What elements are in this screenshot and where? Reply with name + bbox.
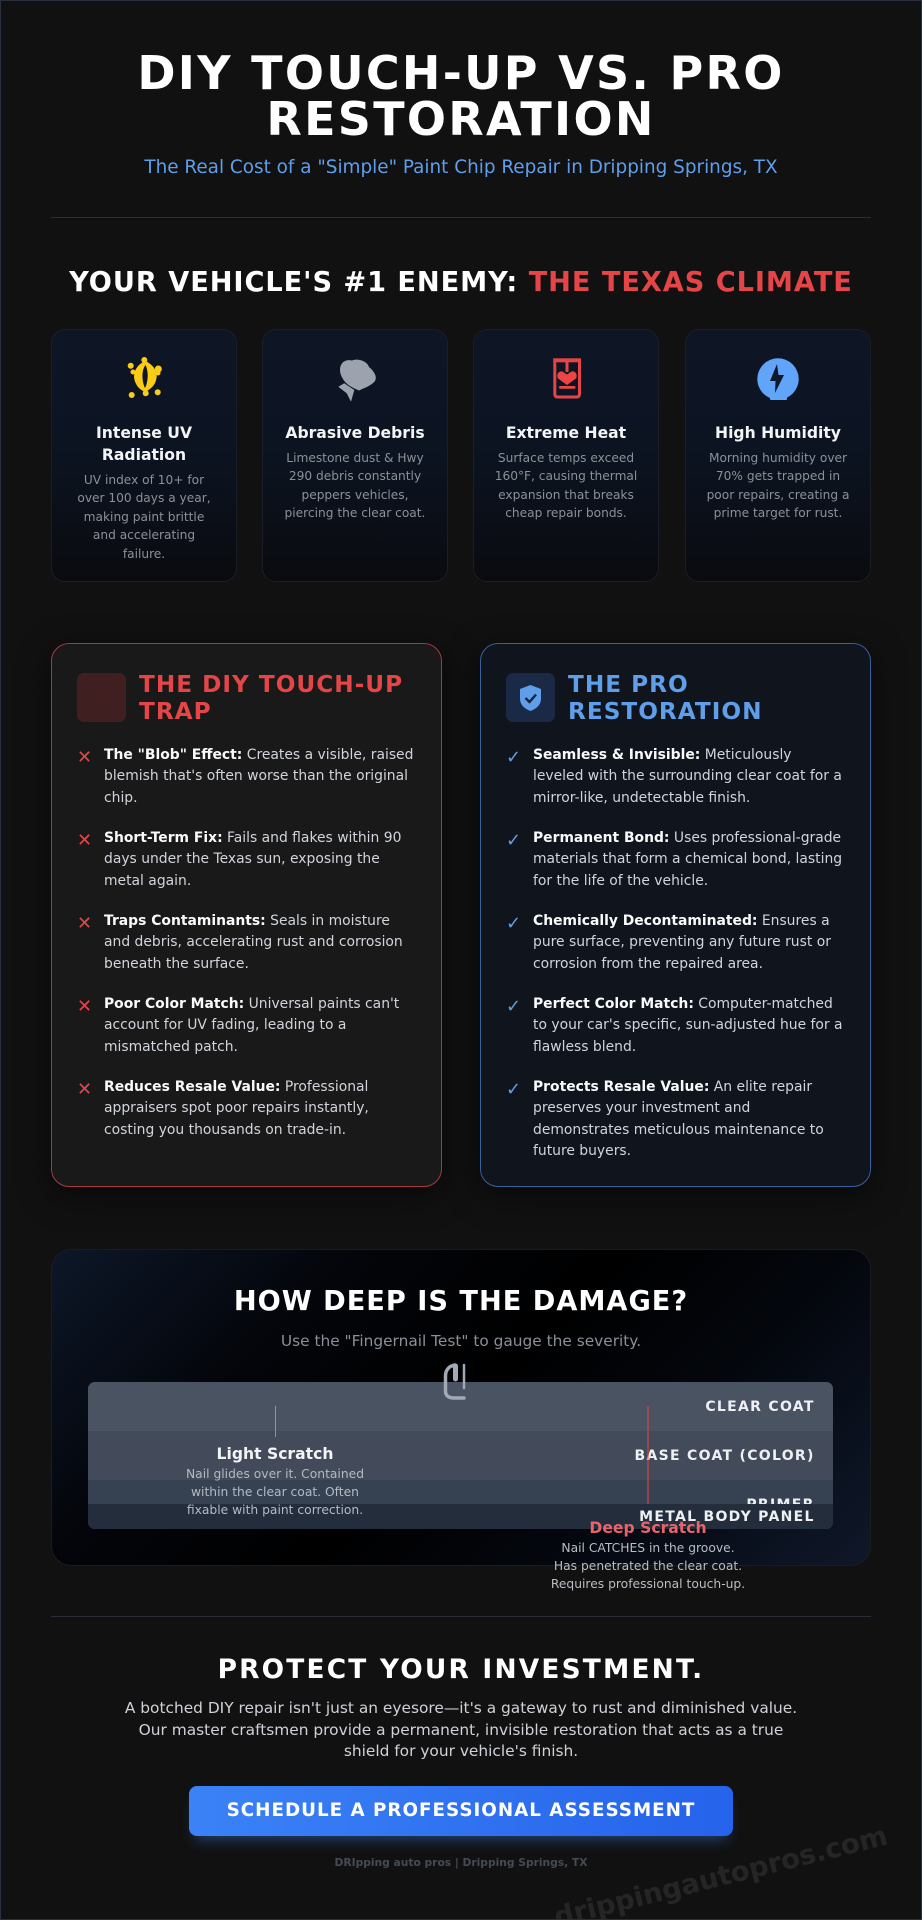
Pro item: seamless: Seamless & Invisible: Meticulously bbox=[533, 746, 792, 762]
Pro item: seamless: mirror-like, undetectable finish. bbox=[533, 790, 750, 806]
deep scratch marker bbox=[647, 1406, 649, 1504]
Pro item: protects resale value: demonstrates meticulous maintenance to bbox=[533, 1122, 824, 1138]
deep scratch description: Nail CATCHES in the groove. bbox=[561, 1540, 735, 1554]
card description bbox=[495, 451, 637, 520]
layer: base coat bbox=[88, 1431, 833, 1480]
Pro item: permanent bond bbox=[533, 830, 842, 889]
Pro heading bbox=[568, 671, 762, 725]
DIY item: reduces resale value bbox=[104, 1078, 369, 1138]
title bbox=[137, 46, 785, 146]
CTA button: SCHEDULE A PROFESSIONAL ASSESSMENT bbox=[227, 1800, 695, 1821]
card title: High Humidity bbox=[715, 424, 841, 442]
CTA paragraph: Our master craftsmen provide a permanent, invisible restoration that acts as a true bbox=[139, 1721, 783, 1739]
card description: prime target for rust. bbox=[714, 506, 842, 520]
icon: humidity bolt bbox=[757, 358, 799, 400]
Pro item: permanent bond: for the life of the vehicle. bbox=[533, 873, 708, 889]
mark: check: ✓ bbox=[506, 913, 521, 934]
title: DIY TOUCH-UP VS. PRO bbox=[137, 46, 785, 100]
card description: poor repairs, creating a bbox=[707, 488, 849, 502]
footer credit: DRIpping auto pros | Dripping Springs, TX bbox=[335, 1856, 587, 1869]
card description: and accelerating bbox=[93, 528, 195, 542]
paint layer diagram bbox=[88, 1382, 833, 1529]
icon: heat gauge bbox=[553, 358, 581, 398]
DIY item: traps contaminants: and debris, accelerating rust and corrosion bbox=[104, 934, 403, 950]
layer: metal body panel: METAL BODY PANEL bbox=[639, 1509, 815, 1525]
card title: Radiation bbox=[102, 446, 186, 464]
panel: intense UV radiation card bbox=[51, 329, 237, 582]
mark: check: ✓ bbox=[506, 1079, 521, 1100]
card description: over 100 days a year, bbox=[77, 491, 211, 505]
DIY item: blob effect bbox=[104, 746, 413, 806]
DIY item: reduces resale value: Reduces Resale Value: Professional bbox=[104, 1078, 368, 1094]
icon box: shield bbox=[506, 673, 555, 722]
layer: primer bbox=[88, 1480, 833, 1529]
panel: the pro restoration bbox=[480, 643, 871, 1187]
light scratch marker bbox=[275, 1406, 276, 1437]
mark: cross: ✕ bbox=[77, 996, 92, 1017]
card description bbox=[707, 451, 849, 520]
DIY item: poor color match: mismatched patch. bbox=[104, 1039, 238, 1055]
damage heading: HOW DEEP IS THE DAMAGE? bbox=[234, 1286, 688, 1317]
CTA paragraph: shield for your vehicle's finish. bbox=[344, 1742, 578, 1760]
light scratch description: Nail glides over it. Contained bbox=[186, 1466, 364, 1480]
card description: 160°F, causing thermal bbox=[495, 469, 637, 483]
deep scratch description: Requires professional touch-up. bbox=[551, 1577, 745, 1591]
DIY item: short-term fix: metal again. bbox=[104, 873, 191, 889]
DIY item: short-term fix: days under the Texas sun, exposing the bbox=[104, 851, 380, 867]
layer: clear coat bbox=[88, 1382, 833, 1431]
card description: making paint brittle bbox=[84, 510, 204, 524]
layer: base coat: BASE COAT (COLOR) bbox=[635, 1448, 815, 1464]
DIY item: blob effect: blemish that's often worse than the original bbox=[104, 768, 408, 784]
Pro item: permanent bond: materials that form a chemical bond, lasting bbox=[533, 851, 842, 867]
CTA heading: PROTECT YOUR INVESTMENT. bbox=[218, 1654, 704, 1685]
panel: high humidity card bbox=[685, 329, 871, 582]
card description: cheap repair bonds. bbox=[505, 506, 627, 520]
DIY item: traps contaminants: Traps Contaminants: Seals in moisture bbox=[104, 912, 390, 928]
DIY item: traps contaminants: beneath the surface. bbox=[104, 956, 249, 972]
card description: failure. bbox=[123, 547, 165, 561]
card title: Abrasive Debris bbox=[285, 424, 425, 442]
DIY item: blob effect: The "Blob" Effect: Creates a visible, raised bbox=[104, 746, 413, 762]
title: RESTORATION bbox=[266, 92, 656, 146]
card description bbox=[285, 451, 425, 520]
mark: cross: ✕ bbox=[77, 830, 92, 851]
Pro item: color match bbox=[533, 996, 843, 1055]
Pro item: color match: flawless blend. bbox=[533, 1039, 636, 1055]
panel: the DIY touch-up trap bbox=[51, 643, 442, 1187]
light scratch label: Light Scratch bbox=[217, 1445, 333, 1463]
card description bbox=[77, 473, 211, 561]
DIY item: short-term fix bbox=[104, 830, 401, 889]
card title bbox=[96, 424, 192, 464]
deep scratch description: Has penetrated the clear coat. bbox=[554, 1559, 742, 1573]
mark: cross: ✕ bbox=[77, 747, 92, 768]
Pro item: decontaminated: pure surface, preventing any future rust or bbox=[533, 934, 831, 950]
Pro item: color match: to your car's specific, sun-adjusted hue for a bbox=[533, 1017, 843, 1033]
mark: check: ✓ bbox=[506, 830, 521, 851]
Pro heading: THE PRO bbox=[568, 671, 689, 698]
Pro item: color match: Perfect Color Match: Computer-matched bbox=[533, 996, 833, 1012]
DIY item: traps contaminants bbox=[104, 912, 403, 972]
DIY item: blob effect: chip. bbox=[104, 790, 138, 806]
CTA paragraph bbox=[125, 1699, 797, 1760]
card title: Extreme Heat bbox=[506, 424, 626, 442]
mark: cross: ✕ bbox=[77, 913, 92, 934]
Pro item: protects resale value: Protects Resale Value: An elite repair bbox=[533, 1078, 812, 1094]
DIY item: reduces resale value: costing you thousands on trade-in. bbox=[104, 1122, 346, 1138]
deep scratch label: Deep Scratch bbox=[589, 1519, 707, 1537]
icon: fingernail bbox=[444, 1363, 466, 1400]
mark: check: ✓ bbox=[506, 747, 521, 768]
CTA button bbox=[189, 1786, 733, 1836]
Pro item: protects resale value bbox=[533, 1078, 824, 1159]
Pro heading: RESTORATION bbox=[568, 698, 762, 725]
card description: Limestone dust & Hwy bbox=[286, 451, 424, 465]
CTA paragraph: A botched DIY repair isn't just an eyesore—it's a gateway to rust and diminished value. bbox=[125, 1699, 797, 1717]
card description: peppers vehicles, bbox=[301, 488, 409, 502]
DIY item: poor color match: Poor Color Match: Universal paints can't bbox=[104, 996, 399, 1012]
icon box: DIY bbox=[77, 673, 126, 722]
DIY item: short-term fix: Short-Term Fix: Fails and flakes within 90 bbox=[104, 830, 401, 846]
layer: clear coat: CLEAR COAT bbox=[705, 1399, 815, 1415]
Pro item: permanent bond: Permanent Bond: Uses professional-grade bbox=[533, 830, 841, 846]
card description: 290 debris constantly bbox=[289, 469, 421, 483]
card title: Intense UV bbox=[96, 424, 192, 442]
mark: check: ✓ bbox=[506, 996, 521, 1017]
layer: metal body panel bbox=[88, 1504, 833, 1529]
card description: piercing the clear coat. bbox=[285, 506, 425, 520]
DIY item: poor color match: account for UV fading, leading to a bbox=[104, 1017, 346, 1033]
DIY heading bbox=[139, 671, 403, 725]
DIY heading: TRAP bbox=[139, 698, 212, 725]
icon: debris bbox=[338, 360, 376, 402]
Pro item: decontaminated bbox=[533, 912, 831, 972]
damage subheading: Use the "Fingernail Test" to gauge the severity. bbox=[281, 1332, 641, 1350]
card description: Surface temps exceed bbox=[498, 451, 634, 465]
card description: UV index of 10+ for bbox=[84, 473, 204, 487]
DIY item: reduces resale value: appraisers spot poor repairs instantly, bbox=[104, 1100, 369, 1116]
card description: expansion that breaks bbox=[498, 488, 634, 502]
Pro item: protects resale value: preserves your investment and bbox=[533, 1100, 750, 1116]
deep scratch description bbox=[551, 1540, 745, 1591]
light scratch description: within the clear coat. Often bbox=[191, 1485, 359, 1499]
section heading: Texas climate: YOUR VEHICLE'S #1 ENEMY: THE TEXAS CLIMATE bbox=[69, 267, 853, 298]
panel: abrasive debris card bbox=[262, 329, 448, 582]
light scratch description bbox=[186, 1466, 364, 1517]
DIY item: poor color match bbox=[104, 996, 399, 1055]
Pro item: decontaminated: Chemically Decontaminated: Ensures a bbox=[533, 912, 830, 928]
layer: primer: PRIMER bbox=[746, 1497, 815, 1513]
Pro item: decontaminated: corrosion from the repaired area. bbox=[533, 956, 763, 972]
mark: cross: ✕ bbox=[77, 1079, 92, 1100]
panel: how deep is the damage bbox=[51, 1249, 871, 1566]
card description: Morning humidity over bbox=[709, 451, 847, 465]
card description: 70% gets trapped in bbox=[716, 469, 840, 483]
subtitle: The Real Cost of a "Simple" Paint Chip Repair in Dripping Springs, TX bbox=[144, 157, 778, 178]
Pro item: seamless bbox=[533, 746, 842, 806]
panel: extreme heat card bbox=[473, 329, 659, 582]
light scratch description: fixable with paint correction. bbox=[187, 1503, 363, 1517]
Pro item: protects resale value: future buyers. bbox=[533, 1143, 631, 1159]
Pro item: seamless: leveled with the surrounding clear coat for a bbox=[533, 768, 842, 784]
icon: UV sun bbox=[128, 357, 162, 398]
DIY heading: THE DIY TOUCH-UP bbox=[139, 671, 403, 698]
